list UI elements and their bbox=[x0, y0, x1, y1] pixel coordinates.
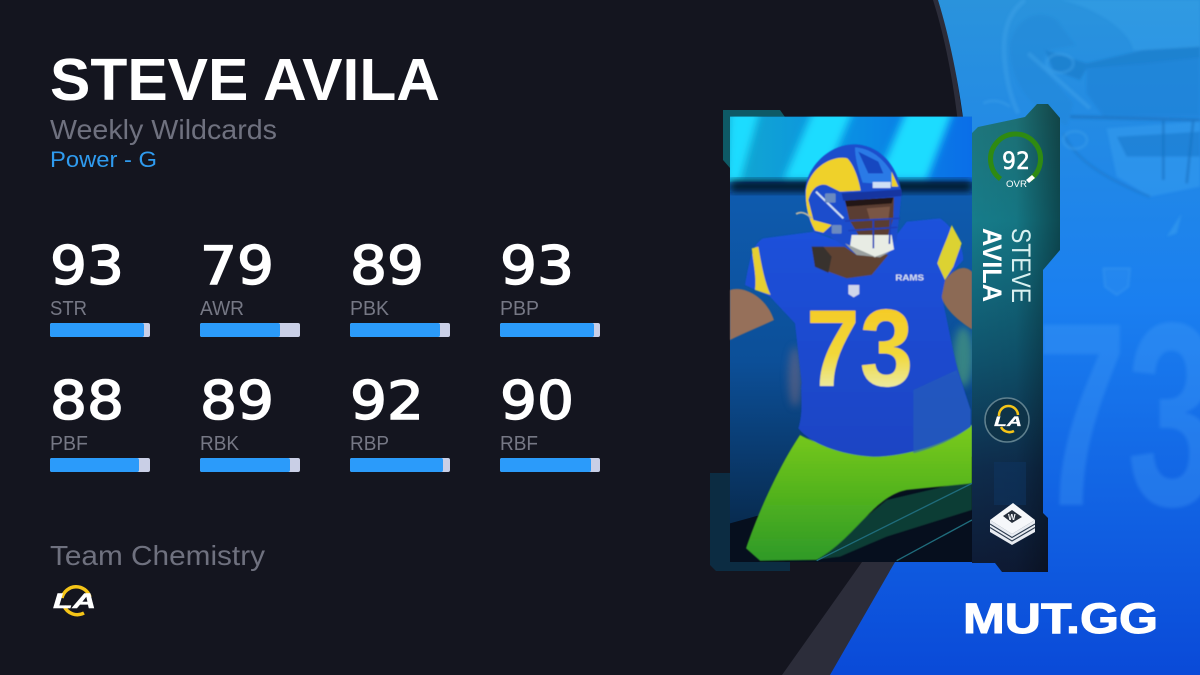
jersey bbox=[745, 218, 971, 457]
stat: STR bbox=[50, 236, 150, 337]
stat: PBF bbox=[50, 371, 150, 472]
helmet crown highlight bbox=[854, 147, 892, 184]
player photo bbox=[727, 110, 973, 562]
stat: PBP bbox=[500, 236, 600, 337]
NFL shield bbox=[848, 285, 859, 297]
ghost helmet outline bbox=[1004, 0, 1025, 113]
stat: RBF: 90 bbox=[500, 371, 574, 432]
chin cup bbox=[850, 235, 894, 257]
stat: AWR: AWR bbox=[200, 298, 244, 320]
ghost NFL shield bbox=[1103, 268, 1130, 295]
neck bbox=[812, 247, 888, 278]
ghost player background bbox=[983, 0, 1200, 295]
photo backdrop bbox=[730, 117, 972, 562]
left sleeve stripe bbox=[752, 247, 771, 295]
vertical first name: STEVE bbox=[1006, 228, 1036, 303]
helmet bbox=[796, 144, 902, 257]
stat: RBP: 92 bbox=[350, 371, 424, 432]
face bbox=[845, 197, 894, 237]
stat: PBK: PBK bbox=[350, 298, 390, 320]
curved edge band bbox=[782, 0, 975, 675]
icon: Rams logo: LA bbox=[53, 590, 96, 613]
ghost visor band bbox=[1045, 47, 1200, 80]
icon: team badge: LA bbox=[994, 413, 1022, 429]
title: STEVE AVILA bbox=[50, 47, 440, 113]
stat: AWR: 79 bbox=[200, 236, 274, 297]
card frame: top left bbox=[723, 110, 785, 168]
bottom floor bbox=[730, 457, 972, 562]
right sleeve stripe bbox=[937, 225, 962, 280]
blue background panel bbox=[830, 0, 1200, 675]
ghost mouth bbox=[1117, 132, 1200, 157]
jersey shade bbox=[913, 370, 971, 453]
stat: RBK: 89 bbox=[200, 371, 274, 432]
ghost facemask bbox=[1063, 117, 1200, 197]
jersey number: 73 bbox=[806, 287, 913, 410]
side panel shading bbox=[972, 104, 1060, 572]
card frame: bottom left bbox=[710, 473, 790, 571]
stat: PBF: PBF bbox=[50, 433, 88, 455]
icon: program stack bbox=[990, 503, 1035, 545]
ghost chin bbox=[1107, 122, 1200, 197]
facemask bbox=[845, 218, 900, 248]
icon: team badge bbox=[985, 398, 1029, 442]
ghost face bbox=[1087, 57, 1200, 117]
stat: RBF: RBF bbox=[500, 433, 538, 455]
ghost collar bbox=[1167, 213, 1182, 237]
subtitle: archetype: Power - G bbox=[50, 147, 157, 172]
subtitle: program: Weekly Wildcards bbox=[50, 114, 277, 145]
visor bar bbox=[842, 189, 902, 201]
right arm bbox=[942, 268, 972, 329]
icon: Rams logo bbox=[53, 587, 96, 615]
stat: PBP: PBP bbox=[500, 298, 539, 320]
helmet side clip bbox=[816, 192, 843, 218]
side panel bbox=[972, 104, 1060, 572]
vertical last name: AVILA bbox=[977, 228, 1007, 302]
pants shadow bbox=[813, 480, 972, 560]
overall rating ring: 92 bbox=[1002, 147, 1030, 175]
side panel lower blocks bbox=[994, 462, 1026, 505]
team chemistry heading: Team Chemistry bbox=[50, 540, 265, 571]
floor lines bbox=[817, 483, 972, 561]
stat: PBK bbox=[350, 236, 450, 337]
RAMS chest text: RAMS bbox=[895, 274, 925, 283]
pants bbox=[746, 425, 972, 561]
stat: RBF bbox=[500, 371, 600, 472]
ghost ear pads bbox=[983, 53, 1090, 149]
icon: program stack: W bbox=[1008, 513, 1016, 522]
ghost horn bbox=[1010, 15, 1075, 127]
overall rating ring bbox=[991, 134, 1041, 189]
overall rating ring: OVR bbox=[1006, 179, 1028, 189]
stat: PBP: 93 bbox=[500, 236, 574, 297]
stat: RBP: RBP bbox=[350, 433, 389, 455]
stat: STR: STR bbox=[50, 298, 87, 320]
blurred background figures bbox=[788, 327, 973, 407]
stat: PBF: 88 bbox=[50, 371, 124, 432]
brand logo: MUT.GG bbox=[963, 595, 1158, 643]
left arm bbox=[730, 289, 774, 340]
helmet shell bbox=[805, 144, 902, 257]
stat: RBP bbox=[350, 371, 450, 472]
dark band bbox=[730, 181, 972, 192]
ghost helmet crown bbox=[1060, 0, 1200, 50]
helmet yellow stripe bbox=[806, 158, 861, 233]
stat: AWR bbox=[200, 236, 300, 337]
hair bbox=[796, 213, 812, 218]
backdrop stripes bbox=[727, 110, 953, 182]
stat: STR: 93 bbox=[50, 236, 124, 297]
stat: PBK: 89 bbox=[350, 236, 424, 297]
stat: RBK bbox=[200, 371, 300, 472]
stat: RBK: RBK bbox=[200, 433, 240, 455]
player card bbox=[710, 104, 1060, 572]
